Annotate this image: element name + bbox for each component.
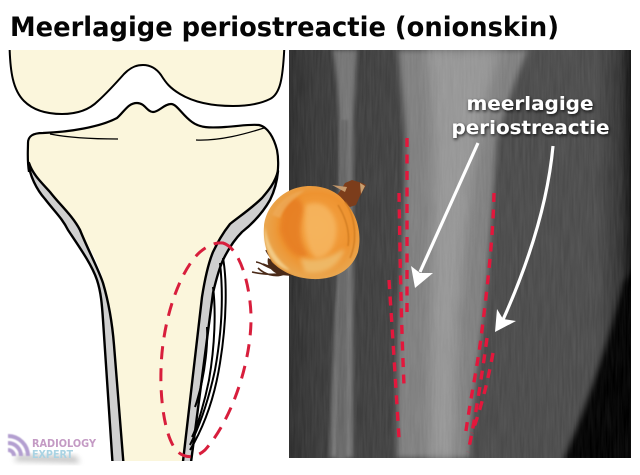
onionskin layers (190, 258, 226, 450)
x-ray label: periostreactie (452, 117, 610, 139)
panel: x-ray (289, 50, 640, 462)
tibia on x-ray (397, 50, 528, 458)
panel: knee diagram (10, 44, 284, 470)
femur (10, 44, 284, 114)
logo: Radiology Expert: EXPERT (32, 449, 74, 461)
icon: onion (252, 180, 366, 279)
arrow 2 (495, 146, 553, 332)
red dashed periosteal lines (389, 138, 494, 452)
onion stem (335, 180, 366, 207)
x-ray label: meerlagige (466, 93, 594, 115)
title: Meerlagige periostreactie (onionskin) (10, 12, 559, 43)
left cortex (29, 163, 124, 470)
arrow 1 (411, 143, 478, 288)
tibia (28, 103, 278, 470)
onion roots (252, 250, 290, 276)
epiphyseal lines (50, 128, 264, 140)
right cortex (182, 171, 278, 470)
red dashed ellipse (161, 243, 251, 457)
onion bulb (264, 186, 359, 279)
x-ray label (452, 93, 610, 139)
fibula (330, 50, 357, 458)
logo: Radiology Expert: RADIOLOGY (32, 438, 96, 450)
dark soft tissue edge (562, 273, 631, 458)
logo: Radiology Expert (8, 436, 96, 463)
